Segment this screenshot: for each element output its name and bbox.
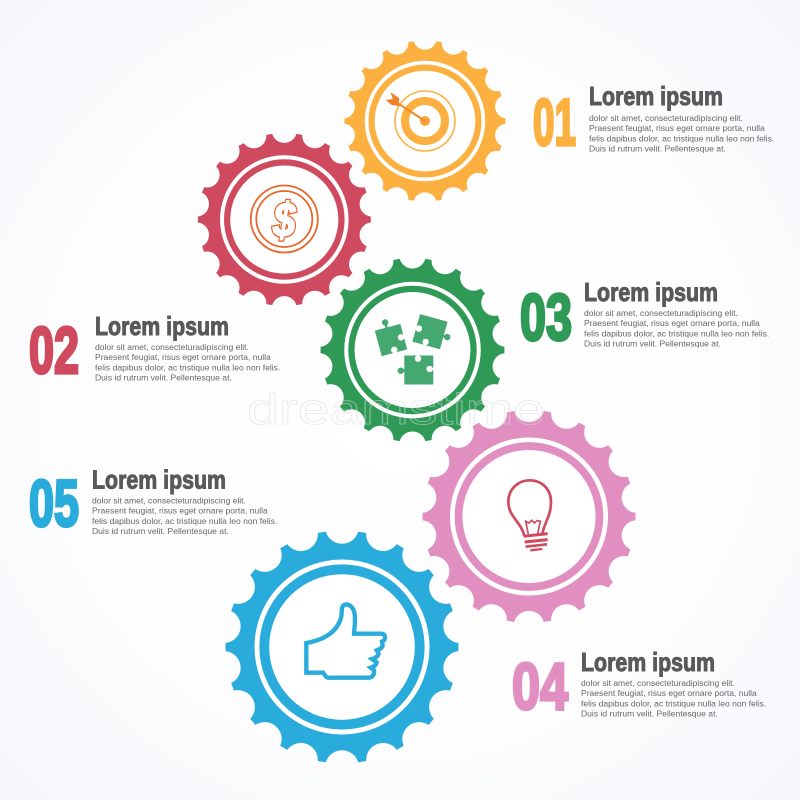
body 05: felis dapibus dolor, ac tristique nulla leo non felis. [92, 516, 277, 526]
body 04: felis dapibus dolor, ac tristique nulla leo non felis. [581, 698, 766, 708]
heading 04: Lorem ipsum [581, 647, 715, 677]
watermark: dreamstime [247, 385, 545, 434]
gear 03: green with puzzle icon [321, 259, 504, 441]
body 05 [92, 496, 277, 536]
icon: light bulb [508, 480, 551, 550]
body 03: Duis id rutrum velit. Pellentesque at. [584, 338, 721, 348]
number 04: 04 [512, 649, 568, 723]
body 05: Praesent feugiat, risus eget ornare porta, nulla [92, 506, 268, 516]
body 01: Praesent feugiat, risus eget ornare porta, nulla [589, 123, 765, 133]
gear 01: yellow with target icon [345, 41, 505, 201]
icon: dollar coin: $ [272, 193, 296, 246]
number 03: 03 [520, 280, 572, 354]
body 02: dolor sit amet, consecteturadipiscing elit. [95, 342, 249, 352]
text block 01 [533, 81, 774, 159]
text block 02 [29, 311, 280, 387]
number 05: 05 [29, 466, 79, 540]
body 04: dolor sit amet, consecteturadipiscing elit. [581, 678, 735, 688]
icon: dollar coin [251, 186, 318, 252]
heading 01: Lorem ipsum [589, 81, 723, 111]
body 01 [589, 113, 774, 154]
text block 05 [29, 464, 277, 540]
icon: target with arrow [386, 91, 455, 151]
gear 02: red with dollar icon [198, 134, 371, 305]
body 04: Praesent feugiat, risus eget ornare porta, nulla [581, 688, 757, 698]
body 03: felis dapibus dolor, ac tristique nulla leo non felis. [584, 328, 769, 338]
body 02: felis dapibus dolor, ac tristique nulla leo non felis. [95, 362, 280, 372]
body 05: Duis id rutrum velit. Pellentesque at. [92, 526, 229, 536]
gear 04: pink with light bulb icon [423, 411, 635, 622]
heading 05: Lorem ipsum [92, 464, 226, 494]
body 01: dolor sit amet, consecteturadipiscing elit. [589, 113, 743, 123]
icon: puzzle pieces [373, 314, 454, 384]
body 01: Duis id rutrum velit. Pellentesque at. [589, 144, 726, 154]
body 02: Praesent feugiat, risus eget ornare porta, nulla [95, 352, 271, 362]
text block 04 [512, 647, 766, 723]
number 01: 01 [533, 85, 576, 159]
icon: dollar coin: $ [272, 193, 296, 246]
body 04: Duis id rutrum velit. Pellentesque at. [581, 708, 718, 718]
body 02: Duis id rutrum velit. Pellentesque at. [95, 372, 232, 382]
gear 05: blue with thumbs-up icon [226, 532, 458, 762]
body 04 [581, 678, 766, 718]
body 03: Praesent feugiat, risus eget ornare porta, nulla [584, 318, 760, 328]
heading 02: Lorem ipsum [95, 311, 229, 341]
heading 03: Lorem ipsum [584, 277, 718, 307]
body 05: dolor sit amet, consecteturadipiscing elit. [92, 496, 246, 506]
body 02 [95, 342, 280, 382]
body 03: dolor sit amet, consecteturadipiscing elit. [584, 308, 738, 318]
text block 03 [520, 277, 769, 354]
body 01: felis dapibus dolor, ac tristique nulla leo non felis. [589, 134, 774, 144]
number 02: 02 [29, 313, 79, 387]
icon: thumbs up [306, 604, 385, 678]
body 03 [584, 308, 769, 348]
